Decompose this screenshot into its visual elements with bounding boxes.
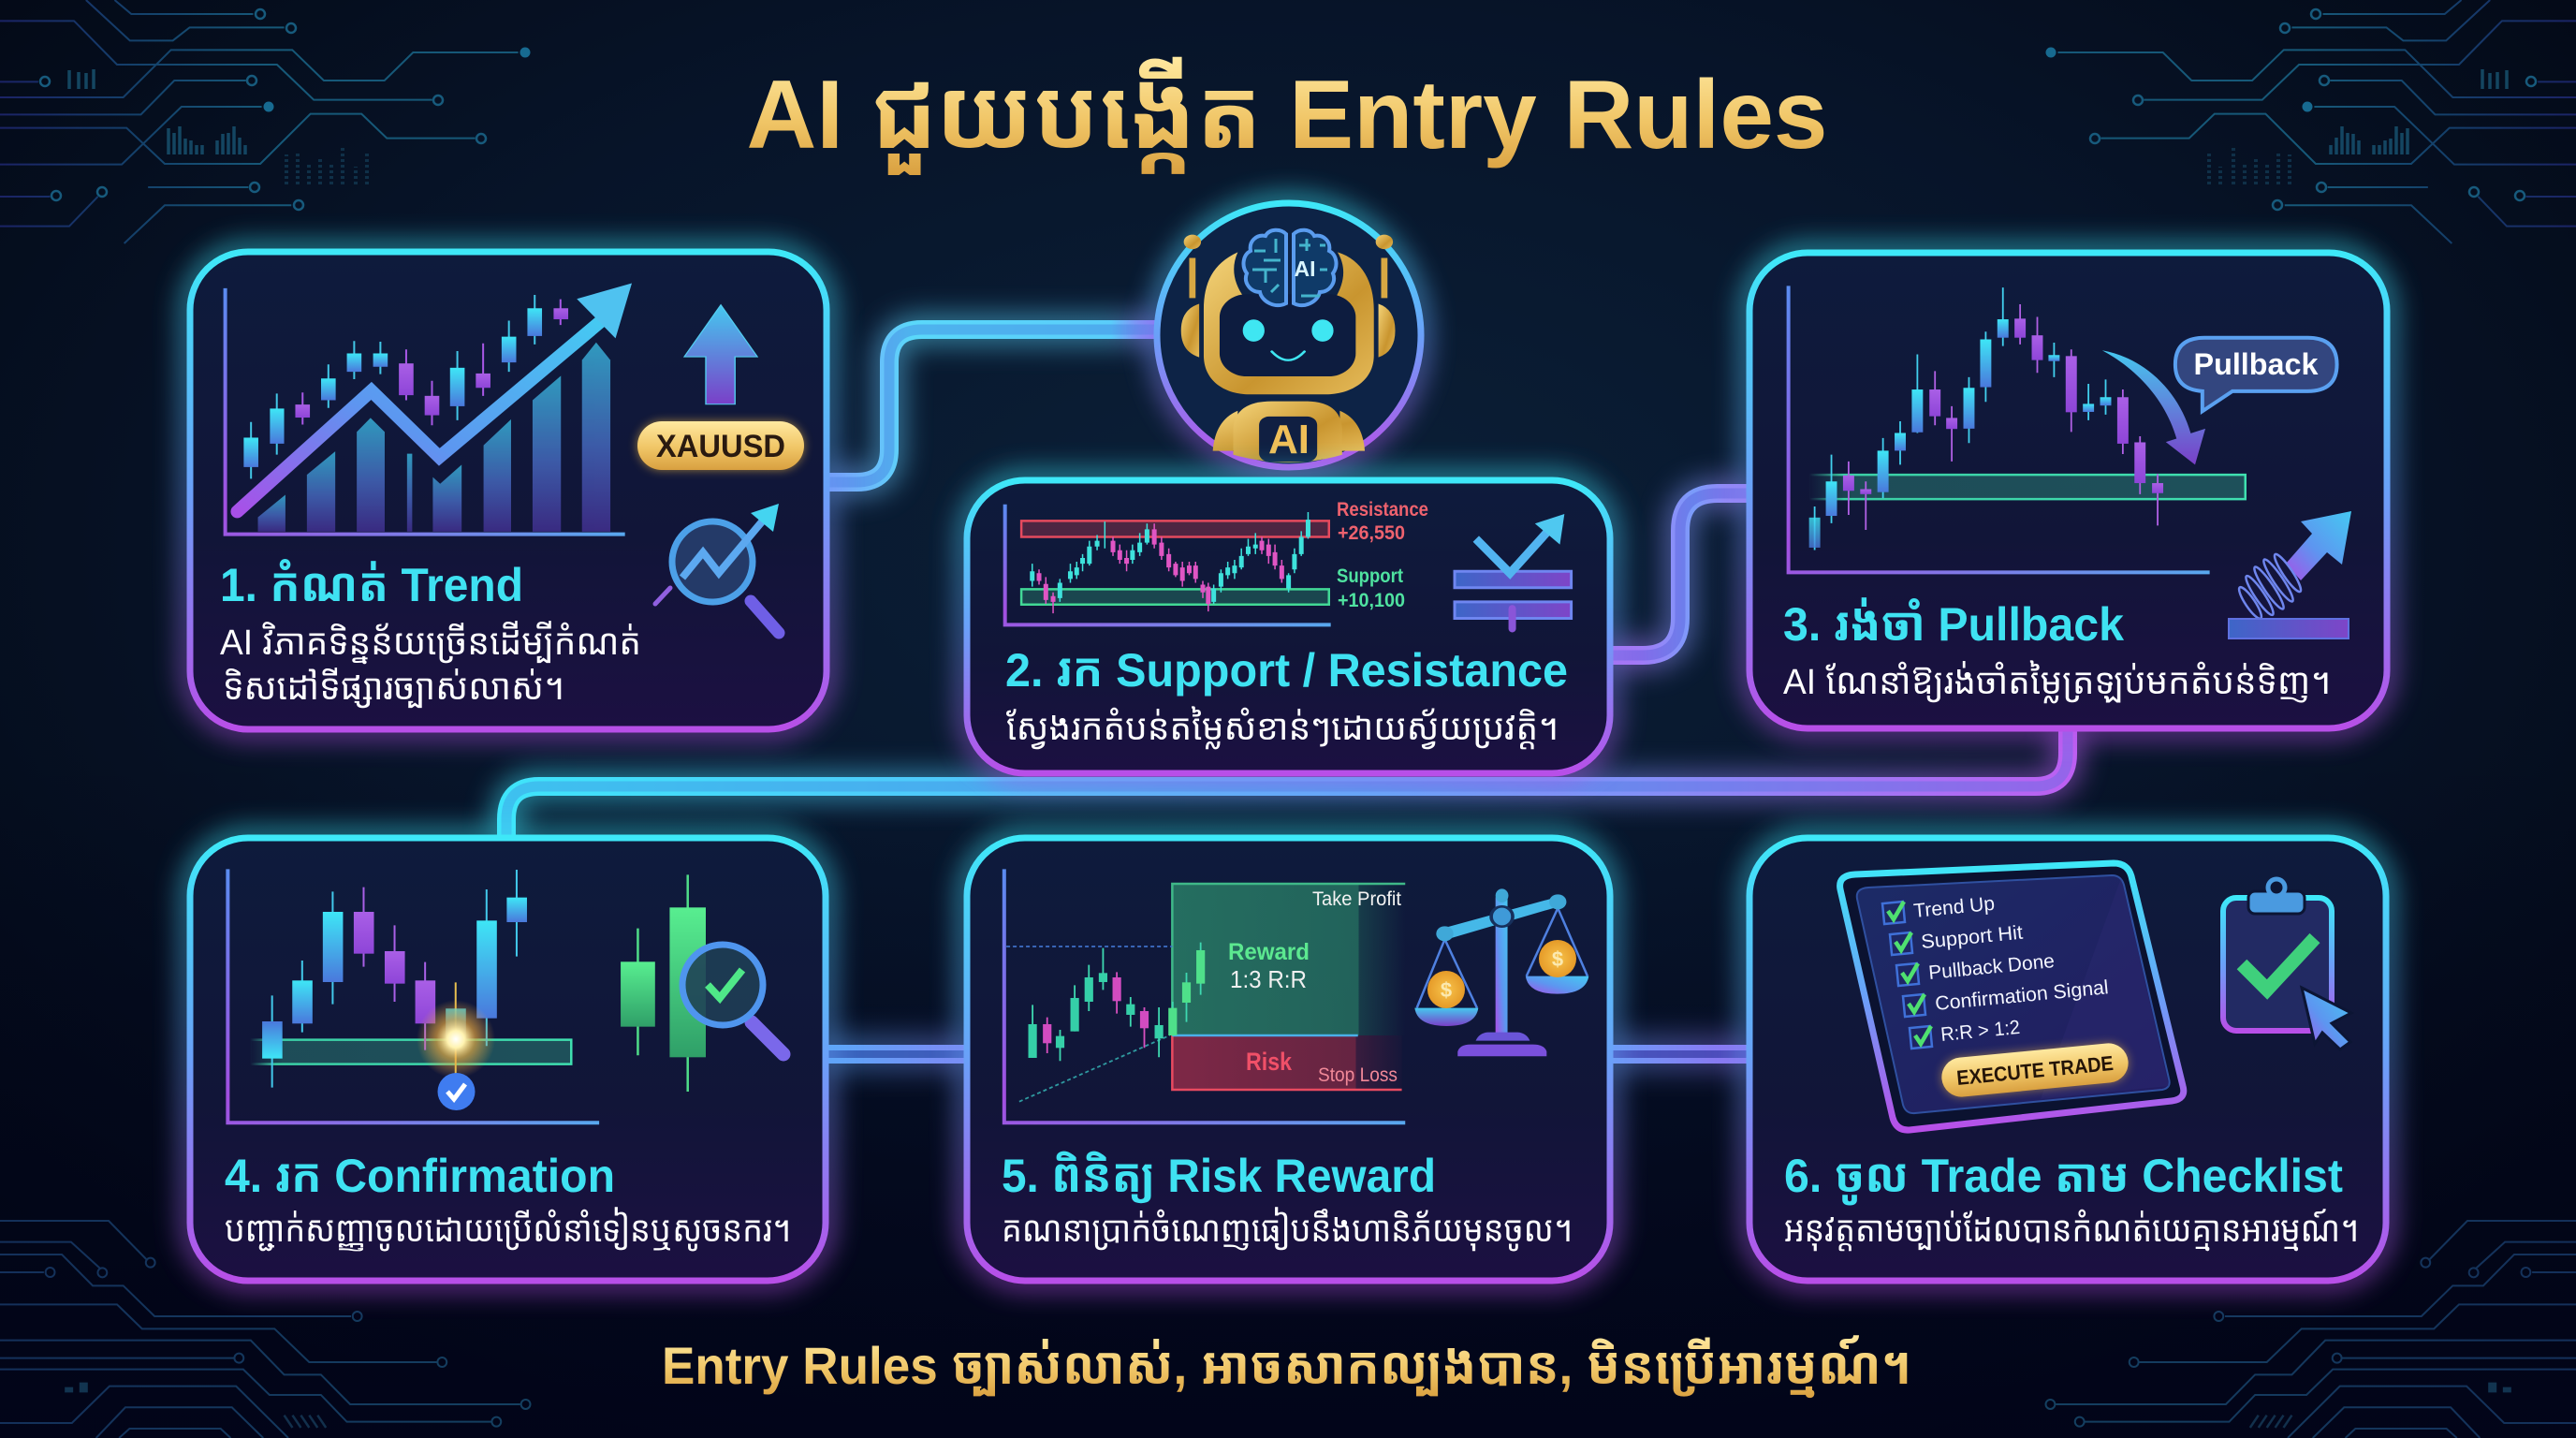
description: step 1: AI វិភាគទិន្នន័យច្រើនដើម្បីកំណត់ xyxy=(220,621,641,665)
AI robot emblem xyxy=(1157,203,1421,467)
icon: spring arrow on base xyxy=(2229,511,2351,638)
icon: balance scale with coins: $ xyxy=(1552,947,1563,971)
connector: panel 1 to AI robot xyxy=(828,330,1161,482)
label: resistance: +26,550 xyxy=(1338,522,1405,544)
button: execute trade xyxy=(1939,1042,2130,1098)
checklist items: Trend Up xyxy=(1912,893,1996,922)
badge: XAUUSD: XAUUSD xyxy=(656,429,785,464)
description: step 1 xyxy=(220,621,641,709)
check boxes xyxy=(1882,902,1932,1049)
panel 1: determine trend xyxy=(190,252,827,729)
heading: step 1: 1. កំណត់ Trend xyxy=(220,559,523,611)
heading: step 6: 6. ចូល Trade តាម Checklist xyxy=(1784,1150,2343,1205)
checklist items: R:R > 1:2 xyxy=(1939,1017,2021,1046)
badge: XAUUSD xyxy=(637,421,804,470)
label: reward ratio: Reward xyxy=(1228,939,1310,965)
label: support xyxy=(1337,565,1405,611)
label: resistance: Resistance xyxy=(1337,499,1428,521)
tablet: checklist card xyxy=(1840,863,2184,1130)
description: step 6: អនុវត្តតាមច្បាប់ដែលបានកំណត់យេគ្មានអារម្មណ៍។ xyxy=(1784,1210,2359,1252)
badge: robot chest AI: AI xyxy=(1268,417,1310,462)
checklist items: Pullback Done xyxy=(1927,950,2056,984)
chart: confirmation candles xyxy=(227,869,599,1123)
label: stop loss: Stop Loss xyxy=(1318,1064,1398,1086)
icon: robot mascot xyxy=(1181,235,1396,462)
chart: reward and risk boxes with candles xyxy=(1004,869,1405,1123)
panel 5: check risk reward xyxy=(967,838,1610,1281)
panel 2: find support and resistance xyxy=(967,480,1610,773)
panel 4: find confirmation xyxy=(190,838,826,1281)
label: risk: Risk xyxy=(1246,1048,1293,1076)
panel 3: wait for pullback xyxy=(1749,253,2387,728)
connector: panel 2 to panel 3 xyxy=(1610,493,1749,655)
icon: circuit brain: AI xyxy=(1294,257,1316,281)
label: reward ratio xyxy=(1228,939,1310,993)
title: AI ជួយបង្កើត Entry Rules xyxy=(747,56,1827,176)
button: execute trade: EXECUTE TRADE xyxy=(1955,1051,2115,1090)
heading: step 5: 5. ពិនិត្យ Risk Reward xyxy=(1002,1150,1436,1204)
panel 6: enter trade by checklist xyxy=(1749,838,2386,1281)
icon: glowing signal point xyxy=(417,1000,495,1078)
description: step 5: គណនាប្រាក់ចំណេញធៀបនឹងហានិភ័យមុនចូល។ xyxy=(1002,1207,1573,1251)
description: step 3: AI ណែនាំឱ្យរង់ចាំតម្លៃត្រឡប់មកតំបន់ទិញ។ xyxy=(1783,661,2331,704)
icon: magnifier with trend line xyxy=(655,504,779,633)
checklist items: Confirmation Signal xyxy=(1934,976,2110,1015)
chart: trend candles and rising arrow xyxy=(226,283,632,535)
chart: support and resistance zones xyxy=(1005,505,1331,624)
checklist items: Support Hit xyxy=(1920,922,2024,953)
description: step 4: បញ្ជាក់សញ្ញាចូលដោយប្រើលំនាំទៀនឬសូចនករ។ xyxy=(225,1207,791,1252)
connector: panel 3 to panel 4 xyxy=(506,728,2068,838)
description: step 1: ទិសដៅទីផ្សារច្បាស់លាស់។ xyxy=(223,668,564,709)
label: resistance xyxy=(1337,499,1428,544)
label: take profit: Take Profit xyxy=(1312,888,1401,910)
heading: step 3: 3. រង់ចាំ Pullback xyxy=(1783,597,2124,651)
icon: green candles with magnifier xyxy=(621,874,783,1092)
connector: panel 4 to panel 5 xyxy=(826,1034,967,1072)
heading: step 4: 4. រក Confirmation xyxy=(225,1150,615,1202)
arrow: curved pullback arrow xyxy=(2102,350,2205,464)
callout: pullback bubble xyxy=(2175,338,2337,411)
callout: pullback bubble: Pullback xyxy=(2194,347,2319,381)
checklist items xyxy=(1912,893,2110,1046)
icon: zones with bounce arrow xyxy=(1455,514,1572,628)
description: step 2: ស្វែងរកតំបន់តម្លៃសំខាន់ៗដោយស្វ័យប្រវត្តិ។ xyxy=(1006,707,1559,750)
icon: balance scale with coins xyxy=(1414,888,1588,1056)
icon: clipboard with check and cursor xyxy=(2223,879,2351,1049)
icon: balance scale with coins: $ xyxy=(1441,978,1452,1002)
label: support: Support xyxy=(1337,565,1403,587)
connector: panel 5 to panel 6 xyxy=(1610,1034,1749,1072)
heading: step 2: 2. រក Support / Resistance xyxy=(1005,644,1568,697)
chart: pullback candles xyxy=(1789,286,2246,572)
icon: up arrow xyxy=(684,305,757,404)
label: reward ratio: 1:3 R:R xyxy=(1230,965,1307,993)
icon: circuit brain xyxy=(1244,230,1336,305)
footer tagline: Entry Rules ច្បាស់លាស់, អាចសាកល្បងបាន, មិនប្រើអារម្មណ៍។ xyxy=(662,1335,1910,1398)
icon: blue check badge xyxy=(438,1073,476,1110)
label: support: +10,100 xyxy=(1338,590,1405,611)
